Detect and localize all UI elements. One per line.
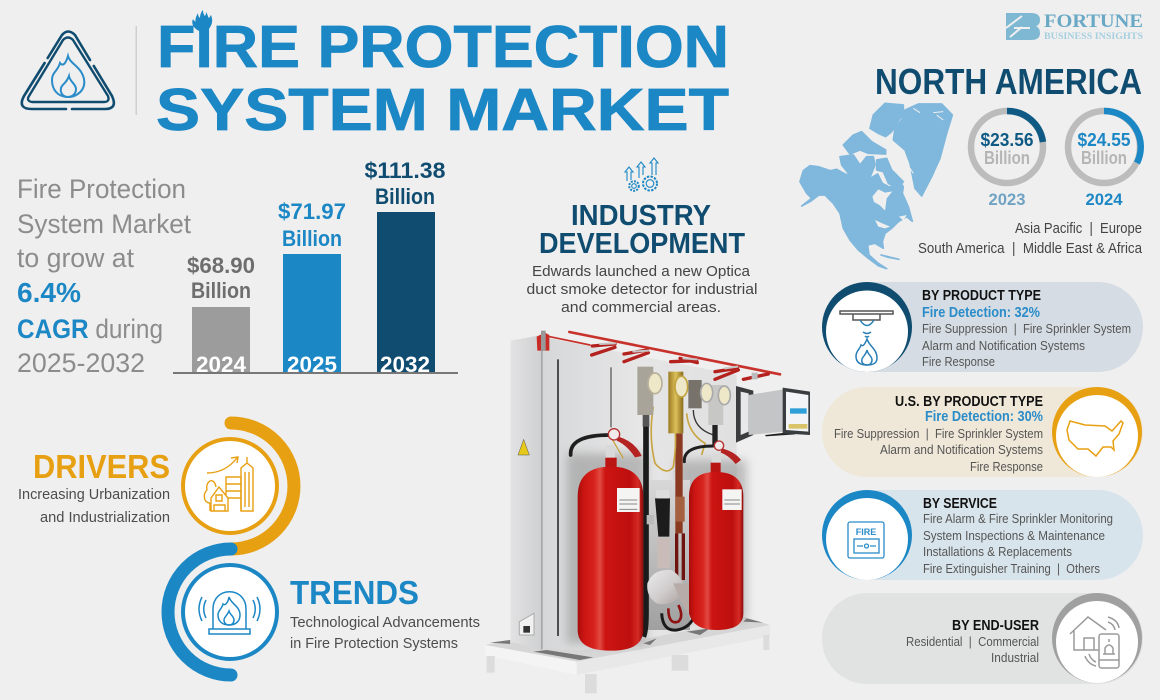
logo: Fortune Business Insights	[1006, 12, 1143, 42]
drivers text: DRIVERS	[33, 448, 170, 485]
other regions: Asia Pacific | Europe	[1015, 221, 1142, 237]
bar chart: 2032	[380, 352, 430, 377]
bar chart: Billion	[191, 278, 251, 303]
pipes and hoses	[643, 417, 646, 637]
CAGR statement: Fire Protection	[17, 174, 186, 204]
CAGR statement: CAGR during	[17, 314, 163, 344]
icon: fire alarm	[199, 592, 260, 634]
industry development text	[526, 263, 758, 316]
icon: smart home alarm	[1070, 617, 1119, 668]
logo: Fortune Business Insights: BUSINESS INSIGHTS	[1044, 32, 1143, 42]
gauges	[637, 367, 653, 415]
drivers text	[18, 448, 170, 526]
panel: by service: Fire Extinguisher Training | Others	[923, 561, 1100, 576]
bar chart: Billion	[282, 226, 342, 251]
industry development text: Edwards launched a new Optica	[532, 263, 751, 280]
title: SYSTEM MARKET	[156, 77, 729, 143]
CAGR statement: 2025-2032	[17, 348, 145, 378]
control display	[736, 386, 753, 443]
donut: 2024	[1068, 111, 1141, 209]
icon: fire alarm call point	[848, 522, 884, 558]
panel: by product type: Fire Suppression | Fire Sprinkler System	[922, 321, 1131, 336]
drivers text: Increasing Urbanization	[18, 487, 170, 503]
drivers text: and Industrialization	[40, 510, 170, 526]
icon: flame on title letter I	[192, 10, 212, 31]
bar chart: $111.38	[364, 158, 446, 183]
title: FIRE PROTECTION	[157, 14, 729, 80]
panel: by product type: Fire Detection: 32%	[922, 305, 1040, 321]
panel: U.S. by product type: U.S. BY PRODUCT TYPE	[895, 394, 1043, 410]
panel: by service: Installations & Replacements	[923, 544, 1072, 559]
trends text: Technological Advancements	[290, 615, 480, 631]
other regions	[918, 221, 1143, 257]
bar chart: $71.97	[278, 199, 346, 224]
trends text: TRENDS	[290, 574, 419, 611]
bar chart: 2024	[196, 352, 247, 377]
fire suppression system illustration	[485, 331, 810, 693]
pipe rail and brackets	[545, 332, 780, 379]
panel: U.S. by product type	[822, 387, 1143, 477]
cabinet	[542, 337, 737, 651]
panel: U.S. by product type: Fire Suppression | Fire Sprinkler System	[834, 426, 1043, 441]
central valve	[655, 498, 670, 537]
CAGR statement: 6.4%	[17, 277, 81, 308]
title	[156, 14, 729, 143]
bar chart: 2025	[287, 352, 337, 377]
base	[485, 617, 770, 662]
trends text	[290, 574, 480, 652]
panel: by end-user: Residential | Commercial	[906, 634, 1039, 649]
icon: U.S. outline	[1067, 421, 1123, 456]
panel: U.S. by product type: Fire Detection: 30%	[925, 409, 1043, 425]
bar chart: $68.90	[187, 253, 255, 278]
CAGR statement: System Market	[17, 209, 192, 239]
donut: 2023: Billion	[984, 148, 1030, 168]
bar chart: Billion	[375, 184, 435, 209]
logo: Fortune Business Insights: FORTUNE	[1044, 12, 1143, 32]
donut: 2024: Billion	[1081, 148, 1127, 168]
heading: industry development: INDUSTRY	[571, 200, 711, 232]
trends text: in Fire Protection Systems	[290, 636, 458, 652]
donut: 2023: 2023	[988, 191, 1026, 209]
panel: by product type: Fire Response	[922, 354, 995, 369]
panel: by end-user	[822, 593, 1143, 684]
industry development text: and commercial areas.	[561, 299, 721, 316]
left tank	[571, 429, 643, 651]
donut: 2024: $24.55	[1078, 129, 1130, 150]
icon: fire warning triangle	[22, 32, 114, 109]
CAGR statement: to grow at	[17, 243, 135, 273]
panel: by service: System Inspections & Maintenance	[923, 528, 1105, 543]
panel: by product type	[822, 282, 1143, 372]
industry development text: duct smoke detector for industrial	[526, 281, 758, 298]
panel: by end-user: Industrial	[991, 650, 1039, 665]
panel: by service: Fire Alarm & Fire Sprinkler Monitoring	[923, 511, 1113, 526]
icon: industry development gears	[625, 158, 658, 191]
panel: by service: BY SERVICE	[923, 496, 997, 512]
panel: U.S. by product type: Fire Response	[970, 459, 1043, 474]
donut: 2023	[971, 111, 1043, 209]
heading: industry development	[539, 200, 745, 260]
panel: by product type: BY PRODUCT TYPE	[922, 288, 1041, 304]
donut: 2023: $23.56	[980, 129, 1034, 150]
panel: by service	[822, 490, 1143, 580]
icon: city growth	[204, 457, 253, 511]
right tank	[684, 441, 743, 630]
other regions: South America | Middle East & Africa	[918, 241, 1143, 257]
bar chart	[173, 158, 458, 377]
icon: fire alarm call point: FIRE	[856, 527, 876, 537]
trends arc and circle	[168, 549, 277, 675]
icon: smoke detector and flame	[840, 311, 893, 365]
drivers arc and circle	[183, 423, 294, 549]
panel: by end-user: BY END-USER	[952, 618, 1039, 634]
heading: industry development: DEVELOPMENT	[539, 228, 745, 260]
panel: by product type: Alarm and Notification Systems	[922, 338, 1085, 353]
CAGR statement	[17, 174, 192, 378]
map: north america	[800, 103, 952, 269]
donut: 2024: 2024	[1086, 191, 1123, 209]
panel: U.S. by product type: Alarm and Notification Systems	[880, 442, 1043, 457]
